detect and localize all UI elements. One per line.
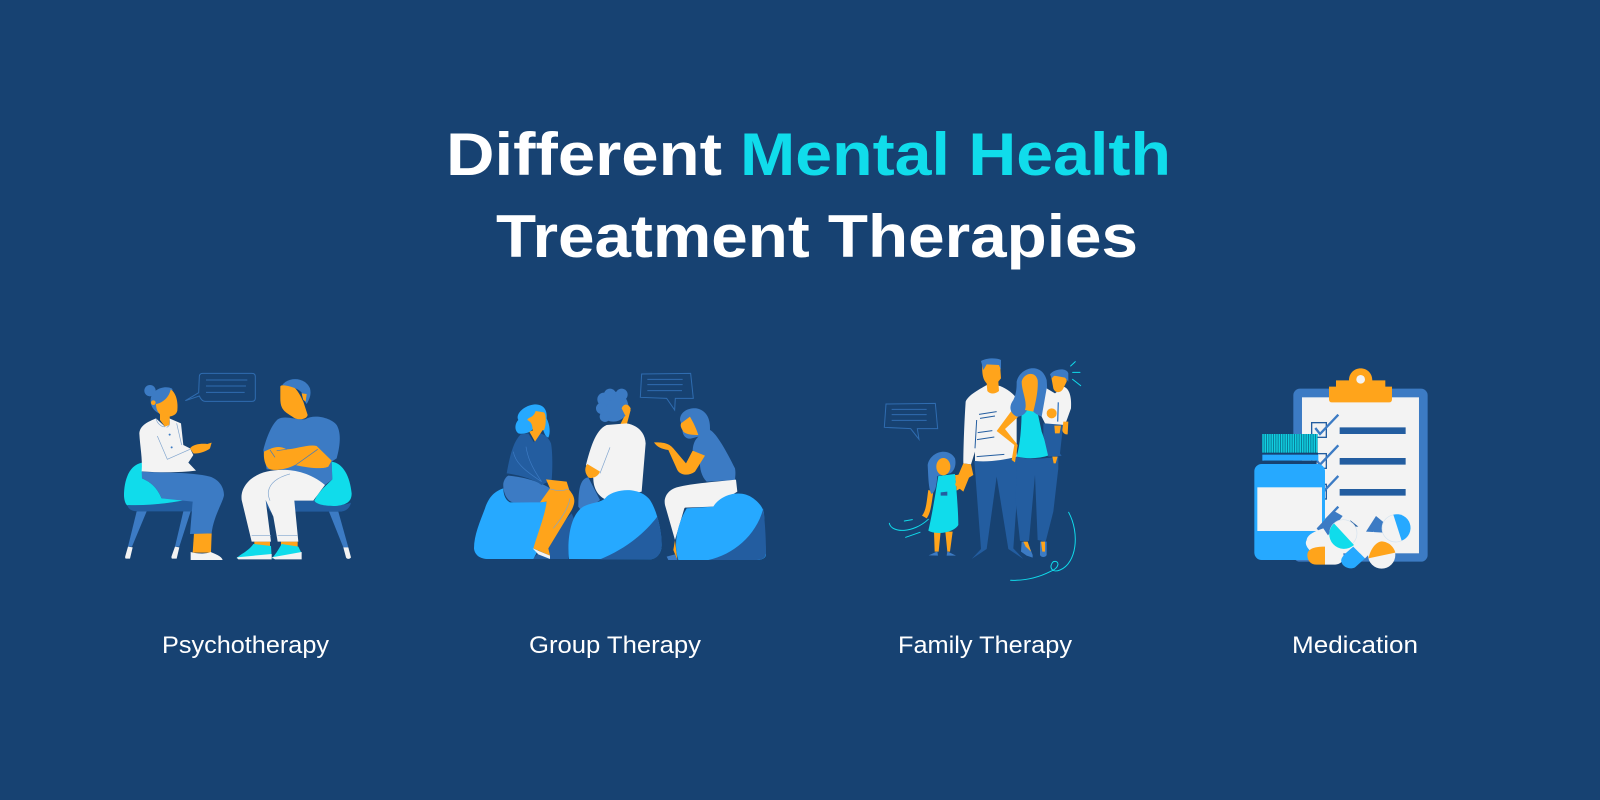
man on bean bag [568,389,662,559]
label: Family Therapy [898,632,1072,659]
panel: group therapy [474,373,766,659]
panel: family therapy [884,358,1081,659]
title: Different [446,121,722,188]
chair [124,463,193,559]
chair [263,501,351,559]
title [446,121,1171,270]
therapist on chair [124,385,224,560]
checklist [1312,415,1406,526]
toddler [1042,369,1071,463]
pills [1306,511,1411,569]
title: Treatment Therapies [496,203,1138,270]
mother [997,368,1058,558]
parents and toddler [955,358,1071,559]
panel: psychotherapy [124,373,352,659]
woman gesturing on bean bag [654,408,766,560]
woman on bean bag [474,404,577,559]
therapist figure [139,385,224,560]
label: Medication [1292,632,1418,659]
speech bubble and motion lines [884,362,1081,580]
patient on chair [237,379,352,559]
panel: medication [1254,368,1428,659]
title: Mental Health [740,121,1171,188]
father [955,358,1023,559]
daughter [922,452,970,556]
label: Group Therapy [529,632,701,659]
pill bottle [1254,434,1325,560]
speech bubble [640,373,693,410]
clipboard [1293,368,1428,562]
patient figure [237,379,352,559]
speech bubble [185,373,255,401]
clipboard, checklist and bottle [1254,368,1428,562]
label: Psychotherapy [162,632,329,659]
